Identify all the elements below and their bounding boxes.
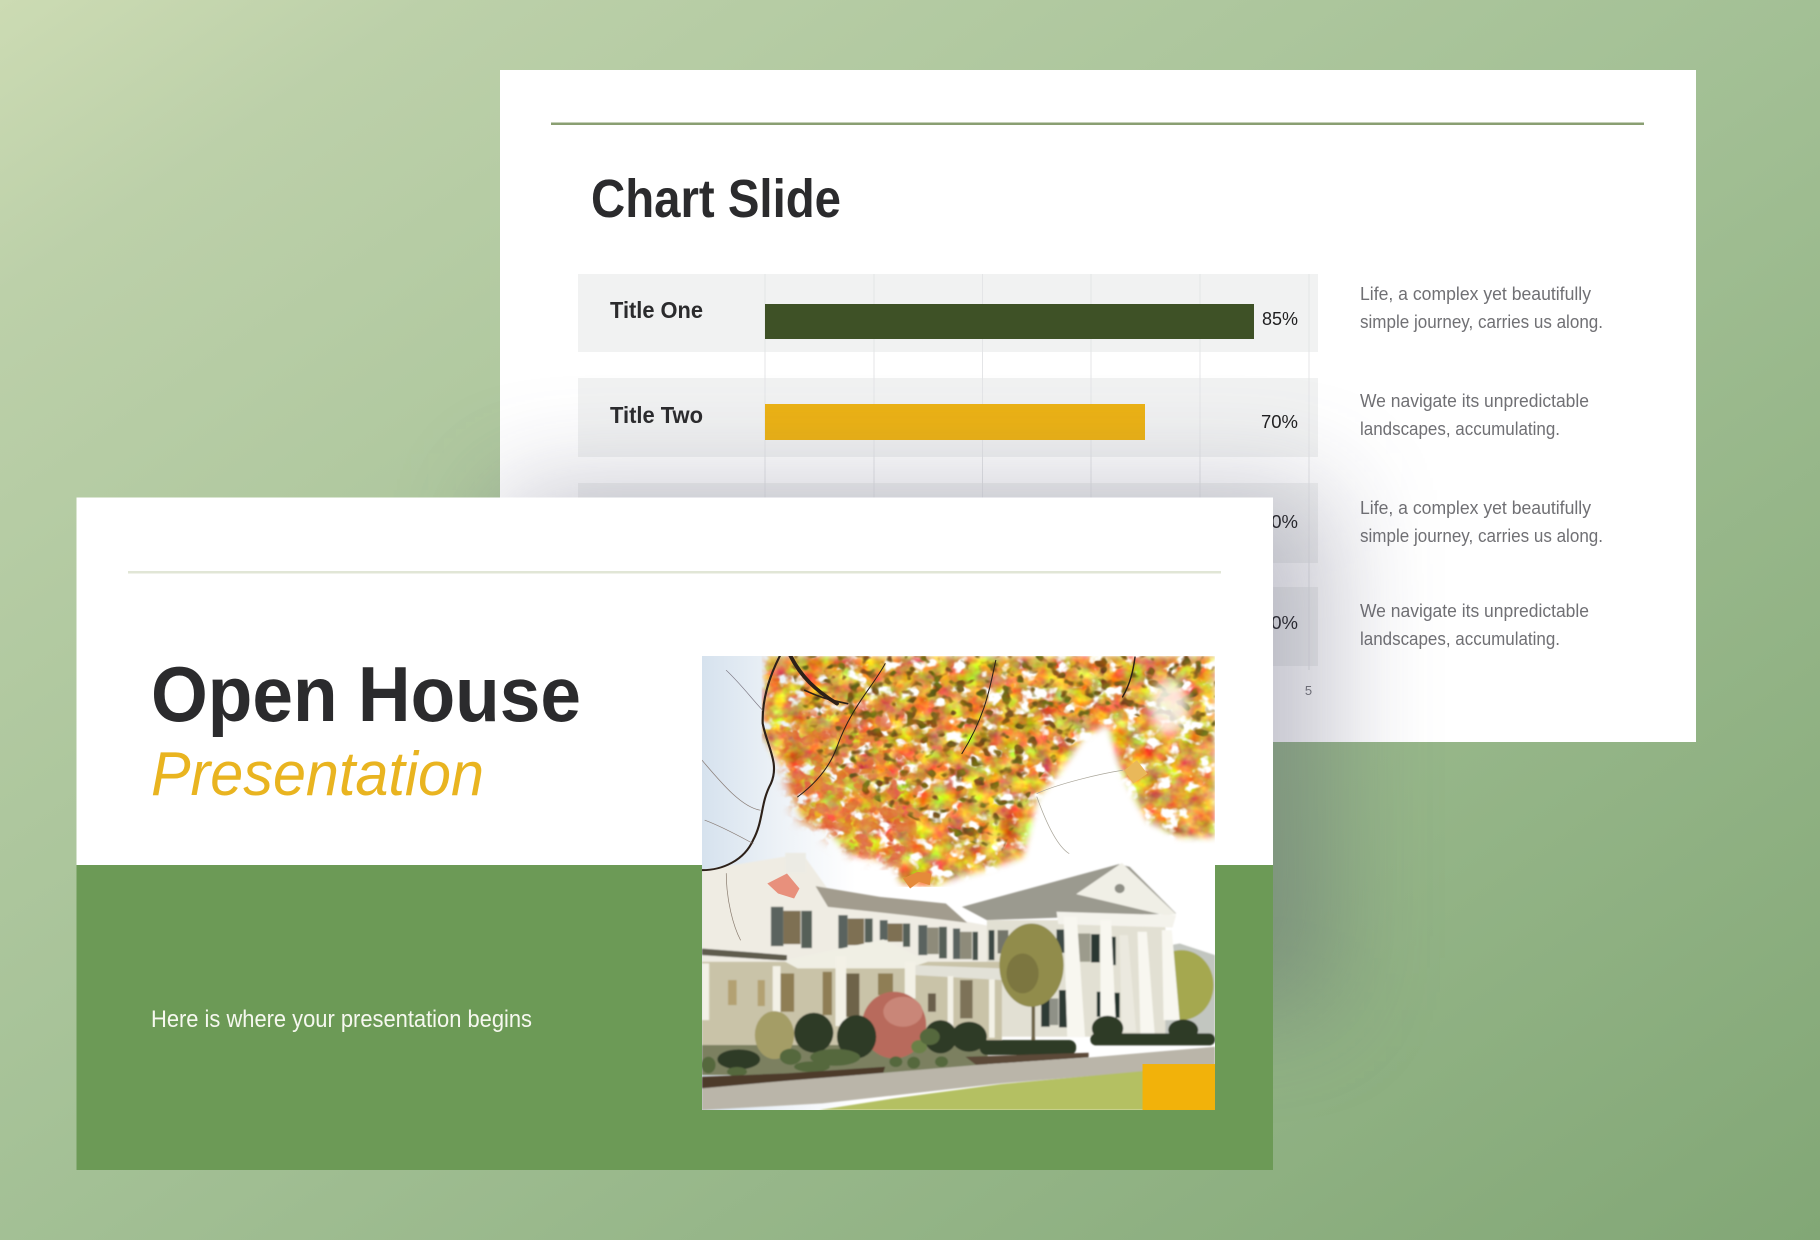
value: 70%: 70%	[1261, 412, 1298, 432]
rear wing at right	[1144, 943, 1215, 1040]
description three: Life, a complex yet beautifully	[1360, 497, 1592, 518]
heading: Chart Slide: Chart Slide	[591, 169, 841, 229]
value: row four: 50%	[1261, 613, 1298, 633]
chart slide card	[500, 70, 1696, 742]
bar: Title One 85%	[765, 304, 1254, 339]
pediment round window	[1115, 884, 1125, 893]
left gabled wing wall	[702, 857, 1001, 1040]
tagline: Here is where your presentation begins	[151, 1006, 532, 1033]
foundation beds	[702, 1045, 988, 1075]
center olive tree	[1032, 990, 1035, 1040]
tan bush	[755, 1011, 794, 1059]
portico columns	[1064, 917, 1180, 1037]
porch gable	[783, 939, 928, 968]
panel: chart slide	[500, 70, 1696, 742]
pediment	[1076, 863, 1176, 915]
top rule	[551, 122, 1644, 125]
subtitle: Presentation: Presentation	[151, 740, 484, 809]
right porch roof	[915, 965, 1003, 980]
porch ceiling and wall	[702, 962, 1002, 1048]
bar: Title Two 70%	[765, 404, 1145, 440]
description three: simple journey, carries us along.	[1360, 525, 1603, 546]
lone orange leaves	[767, 760, 1148, 898]
right main roof	[962, 864, 1176, 920]
tree branches	[702, 656, 1135, 940]
row label: Title One: Title One	[610, 297, 703, 323]
green shrubs	[701, 1028, 948, 1076]
row backgrounds	[578, 274, 1318, 666]
right yellow-green tree	[1149, 950, 1214, 1020]
left roof	[816, 886, 967, 923]
description two: landscapes, accumulating.	[1360, 418, 1560, 439]
porch roof line	[702, 948, 787, 961]
pink bush	[862, 992, 926, 1058]
description one: Life, a complex yet beautifully	[1360, 283, 1592, 304]
title: Open House: Open House	[151, 650, 581, 738]
yellow corner block	[1143, 1064, 1215, 1110]
chimney	[785, 853, 806, 873]
panel: title slide	[76, 498, 1273, 1170]
sun glare	[1149, 679, 1189, 735]
canopy red-orange leaves	[769, 700, 930, 870]
entablature	[1056, 912, 1176, 927]
canopy golden base	[762, 656, 1215, 887]
title slide white area	[76, 498, 1273, 866]
bar chart	[578, 274, 1318, 698]
mulch beds	[702, 1067, 885, 1089]
porch columns	[702, 956, 995, 1038]
description four: We navigate its unpredictable	[1360, 600, 1589, 621]
gravel driveway	[702, 1047, 1215, 1110]
autumn canopy	[702, 656, 1215, 940]
title slide green band	[76, 865, 1273, 1170]
photo: white colonial house under autumn leaves	[702, 656, 1215, 1110]
lawn	[819, 1068, 1215, 1110]
porch windows and doors	[728, 972, 973, 1018]
portico wall	[987, 920, 1165, 1037]
house	[701, 853, 1215, 1110]
value: row three: 60%	[1261, 512, 1298, 532]
axis grid lines	[764, 274, 1310, 670]
description four: landscapes, accumulating.	[1360, 628, 1560, 649]
row label: Title Two: Title Two	[610, 402, 703, 428]
sky	[702, 656, 1215, 1110]
top rule	[128, 571, 1221, 574]
canopy dark leaves	[787, 656, 1215, 854]
dark shrubs	[717, 1013, 1215, 1069]
soft shadow of front slide	[500, 490, 1330, 1010]
description one: simple journey, carries us along.	[1360, 311, 1603, 332]
shuttered windows	[771, 907, 1120, 1027]
value: 85%: 85%	[1262, 309, 1298, 329]
description two: We navigate its unpredictable	[1360, 390, 1589, 411]
axis tick: 5: 5	[1305, 683, 1312, 698]
